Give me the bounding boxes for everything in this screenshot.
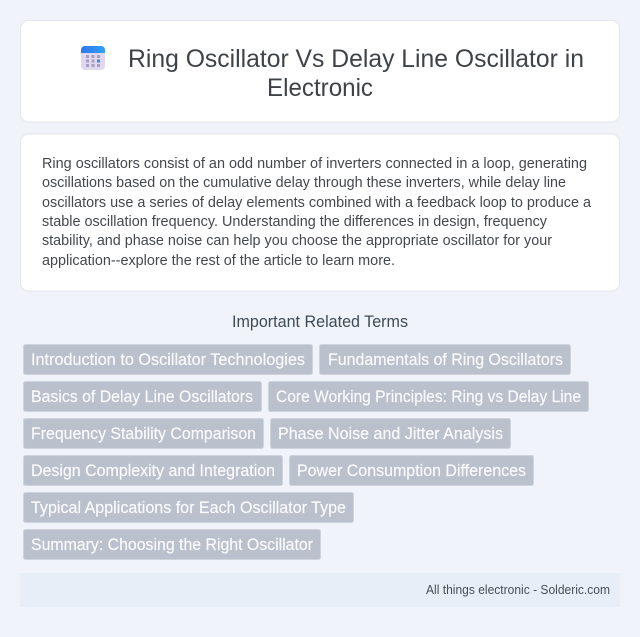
tag: Phase Noise and Jitter Analysis xyxy=(278,424,503,443)
footer: All things electronic - Solderic.com xyxy=(426,583,610,597)
tag xyxy=(270,418,510,448)
tag xyxy=(268,382,588,412)
text block: intro: oscillators use a series of delay elements combined with a feedback loop to produce a xyxy=(42,194,592,211)
tag xyxy=(24,530,320,560)
title: Ring Oscillator Vs Delay Line Oscillator in xyxy=(128,45,584,73)
title xyxy=(128,45,584,102)
text block: intro: stability, and phase noise can help you choose the appropriate oscillator for your xyxy=(42,232,552,249)
tag: Basics of Delay Line Oscillators xyxy=(31,387,253,406)
tag xyxy=(290,456,534,486)
text block: intro: application--explore the rest of the article to learn more. xyxy=(42,252,395,269)
tag: Introduction to Oscillator Technologies xyxy=(31,350,305,369)
panel: header card xyxy=(20,20,620,122)
tag xyxy=(320,344,570,374)
tag: Fundamentals of Ring Oscillators xyxy=(328,350,563,369)
tag: Frequency Stability Comparison xyxy=(31,424,256,443)
tag xyxy=(24,418,264,448)
tag: Typical Applications for Each Oscillator Type xyxy=(31,498,346,517)
text block: intro: stable oscillation frequency. Understanding the differences in design, frequency xyxy=(42,213,547,230)
text block: intro xyxy=(42,155,592,269)
tag: Summary: Choosing the Right Oscillator xyxy=(31,535,313,554)
tag xyxy=(24,344,312,374)
title: Electronic xyxy=(267,74,373,102)
tag xyxy=(24,382,262,412)
tag xyxy=(24,456,282,486)
icon: calendar xyxy=(81,46,105,70)
panel: intro paragraph xyxy=(20,134,620,291)
tag: Design Complexity and Integration xyxy=(31,461,275,480)
tag list xyxy=(24,344,588,560)
text block: intro: oscillations based on the cumulative delay through these inverters, while delay line xyxy=(42,174,566,191)
tag: Core Working Principles: Ring vs Delay Line xyxy=(276,387,581,406)
heading: related terms: Important Related Terms xyxy=(232,313,408,331)
text block: intro: Ring oscillators consist of an odd number of inverters connected in a loop, generating xyxy=(42,155,587,172)
footer xyxy=(20,573,620,607)
tag xyxy=(24,492,354,522)
tag: Power Consumption Differences xyxy=(297,461,526,480)
